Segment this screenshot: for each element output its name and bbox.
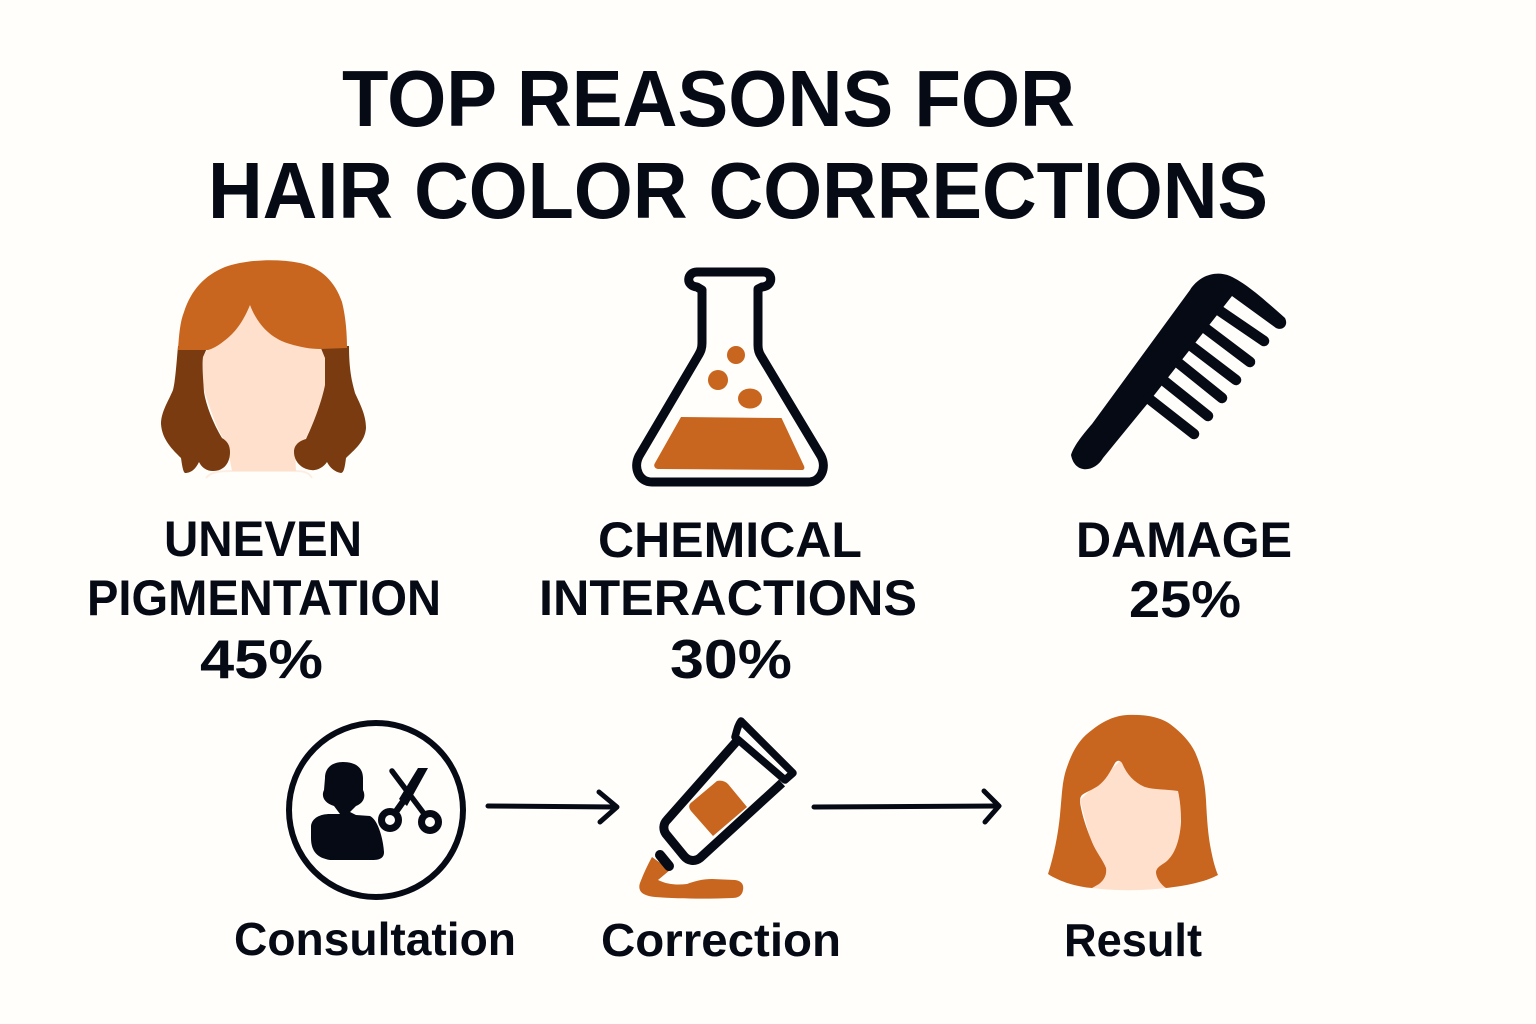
- label: damage 25%: 25%: [1129, 571, 1241, 629]
- panel: chemical interactions: [539, 272, 917, 690]
- title: [208, 54, 1268, 235]
- icon: corrected hair head: [1048, 715, 1218, 890]
- arrow: consultation to correction: [488, 792, 617, 822]
- step: result: [1048, 715, 1218, 966]
- label: correction: Correction: [601, 914, 841, 966]
- icon: flask: [637, 272, 823, 482]
- label: chemical interactions 30%: 30%: [670, 628, 792, 690]
- panel: uneven pigmentation: [87, 260, 441, 690]
- label: chemical interactions 30%: [539, 512, 917, 690]
- arrow: correction to result: [814, 791, 999, 822]
- step: consultation: [234, 723, 516, 965]
- label: damage 25%: DAMAGE: [1076, 512, 1292, 568]
- icon: color tube: [639, 721, 793, 899]
- label: chemical interactions 30%: CHEMICAL: [598, 512, 862, 568]
- icon: two-tone hair head: [161, 260, 366, 478]
- label: damage 25%: [1076, 512, 1292, 629]
- panel: damage: [1071, 274, 1292, 629]
- title: HAIR COLOR CORRECTIONS: [208, 146, 1268, 235]
- icon: comb: [1071, 274, 1286, 469]
- icon: client and scissors in circle: [289, 723, 463, 897]
- label: uneven pigmentation 45%: [87, 511, 441, 690]
- label: uneven pigmentation 45%: 45%: [200, 628, 323, 690]
- label: uneven pigmentation 45%: UNEVEN: [164, 511, 362, 567]
- label: consultation: Consultation: [234, 913, 516, 965]
- step: correction: [601, 721, 841, 966]
- label: uneven pigmentation 45%: PIGMENTATION: [87, 570, 441, 626]
- title: TOP REASONS FOR: [342, 54, 1075, 143]
- label: result: Result: [1064, 914, 1202, 966]
- label: chemical interactions 30%: INTERACTIONS: [539, 570, 917, 626]
